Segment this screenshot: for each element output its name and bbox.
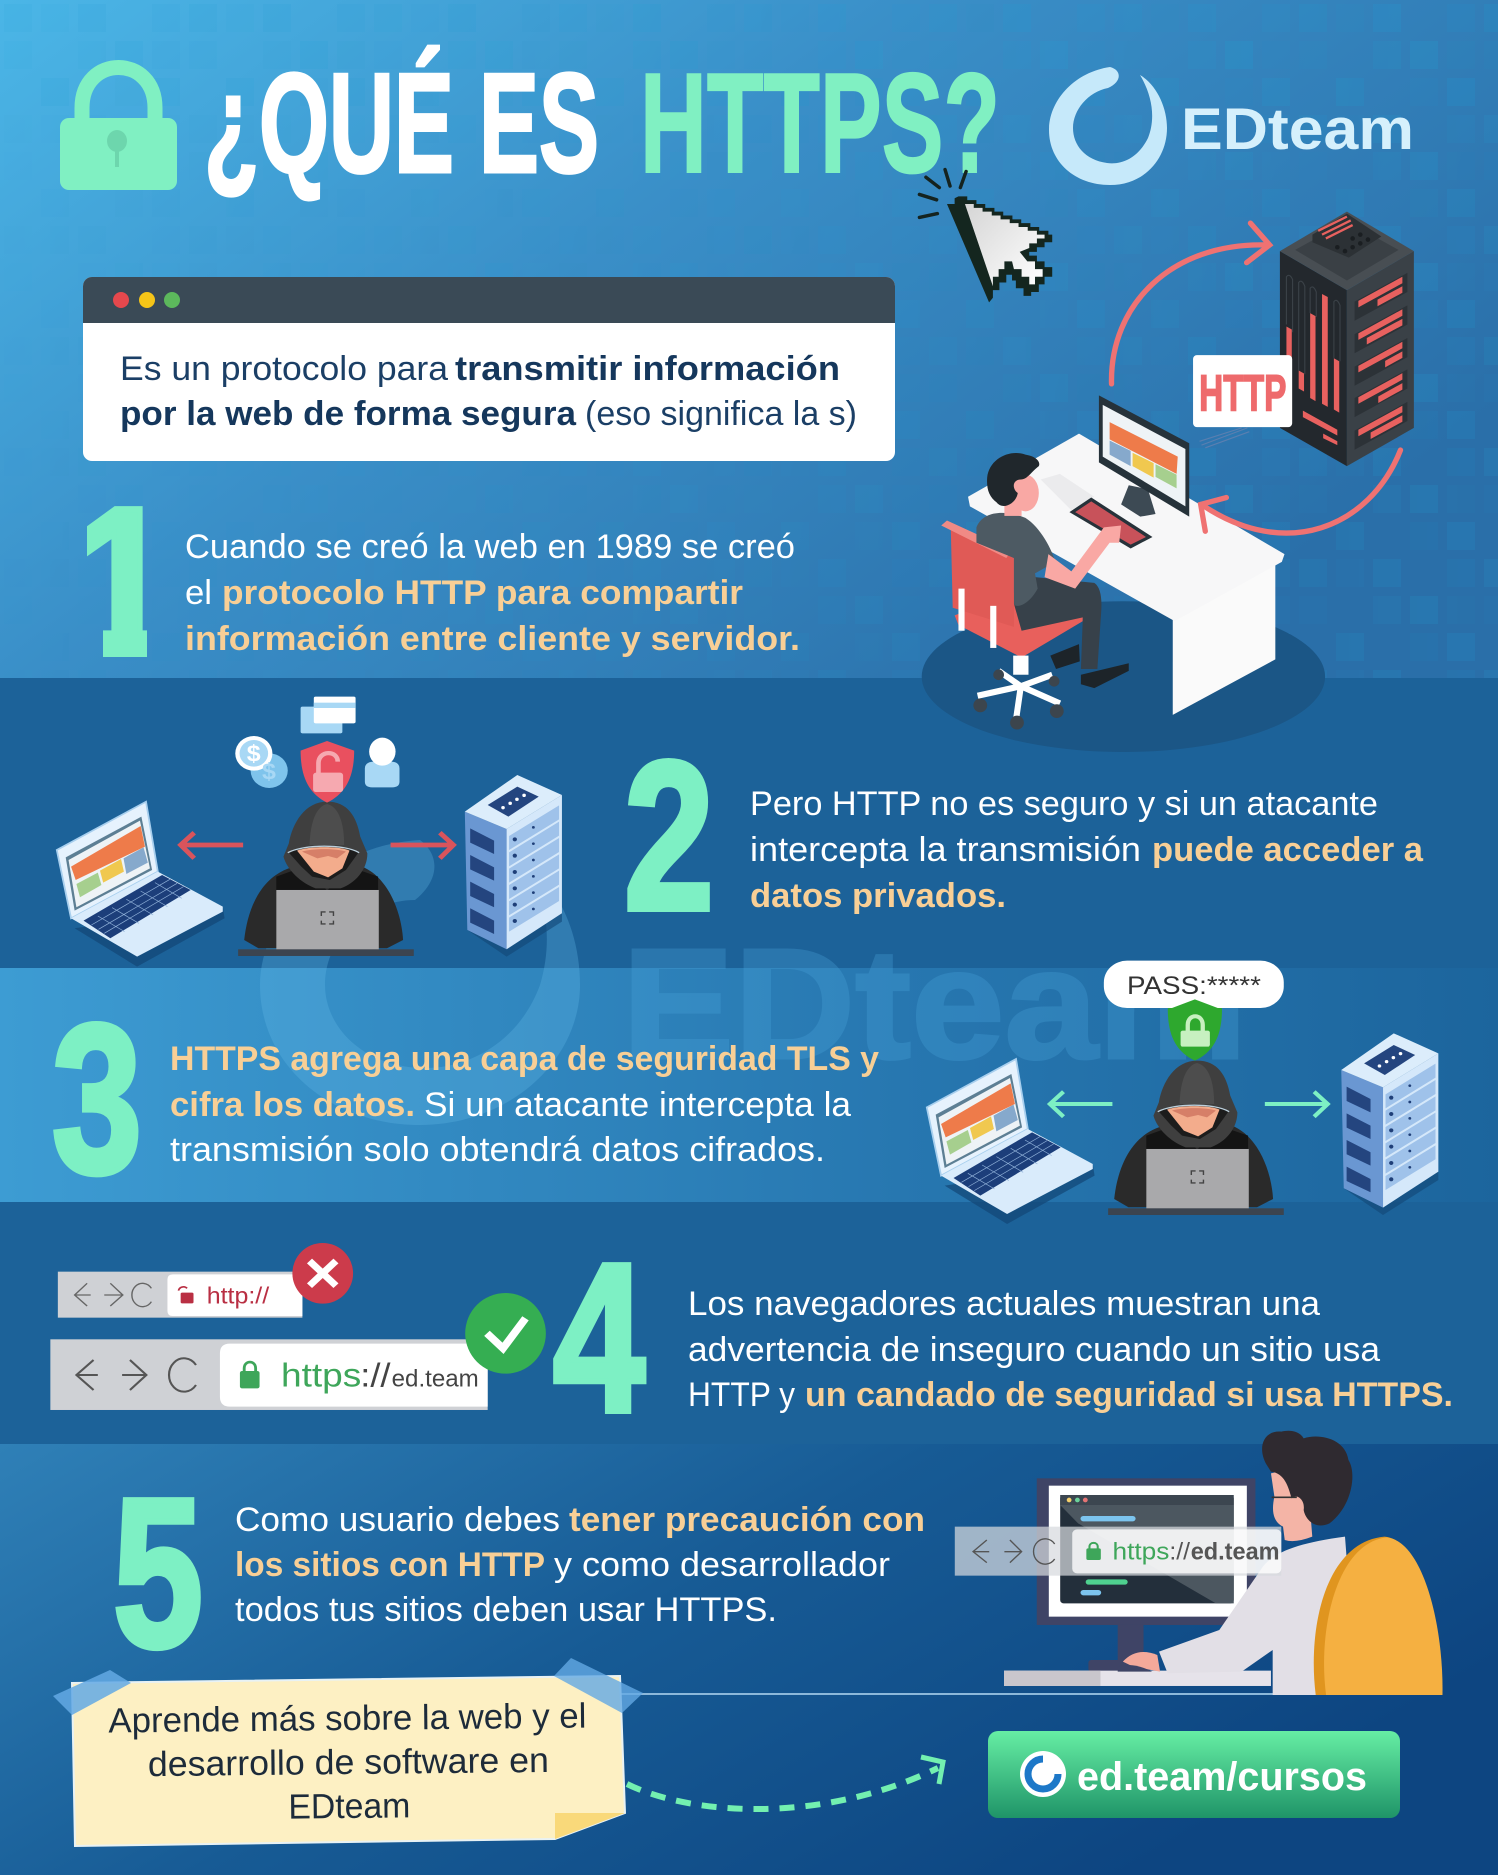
illustration: developer at monitor (955, 1431, 1443, 1695)
icon: coins (235, 736, 288, 788)
text: step 3: cifra los datos. (170, 1086, 415, 1124)
text: step 1: protocolo HTTP para compartir (222, 574, 743, 612)
desk (1004, 1671, 1271, 1686)
icon: padlock (60, 68, 177, 190)
sticky note (53, 1658, 643, 1846)
hacker (1108, 1061, 1284, 1215)
illustration: browser address bars (50, 1243, 546, 1410)
https bar: ed.team (392, 1365, 479, 1392)
text: step 2: datos privados. (750, 877, 1006, 915)
text: step 5: tener precaución con (569, 1501, 925, 1539)
person (976, 453, 1129, 688)
icon: error (292, 1243, 353, 1304)
panel: browser window definition (83, 277, 895, 461)
text: step 5: Como usuario debes (235, 1501, 560, 1539)
background band 1 (0, 0, 1498, 678)
text: step 3: 3 (52, 980, 142, 1217)
text: step 2 (624, 717, 1424, 954)
text: step 1: Cuando se creó la web en 1989 se creó (185, 528, 795, 566)
panel: browser window definition: (eso significa la s) (585, 395, 857, 433)
monitor (1099, 395, 1189, 517)
background band 3 (0, 968, 1498, 1202)
text: step 3 (52, 980, 879, 1217)
arrows (181, 833, 453, 858)
illustration: attacker sees encrypted data (927, 961, 1438, 1224)
background band 5 (0, 1444, 1498, 1875)
person (1118, 1431, 1357, 1695)
title: ¿QUÉ ES (204, 44, 599, 203)
logo: EDteam: EDteam (1181, 97, 1414, 162)
monitor (1037, 1478, 1255, 1672)
server (1341, 1033, 1438, 1215)
text: step 5: todos tus sitios deben usar HTTPS. (235, 1591, 777, 1629)
label: HTTP (1193, 355, 1292, 448)
server (465, 775, 562, 957)
logo: EDteam (1049, 67, 1414, 185)
address bar overlay (955, 1527, 1281, 1576)
text: step 4: Los navegadores actuales muestran una (688, 1285, 1320, 1323)
text: step 4: HTTP y (688, 1376, 795, 1414)
address bar overlay: https (1113, 1539, 1169, 1565)
text: step 4: advertencia de inseguro cuando un sitio usa (688, 1331, 1380, 1369)
arrow: dashed to button (627, 1757, 943, 1809)
icon: success (465, 1293, 546, 1374)
icon: coins: $ (262, 759, 277, 785)
address bar overlay: :// (1169, 1539, 1190, 1565)
https bar: https (281, 1358, 361, 1394)
server (1280, 212, 1414, 466)
text: step 2: intercepta la transmisión (750, 831, 1141, 869)
sticky note: Aprende más sobre la web y el (108, 1697, 587, 1741)
laptop (57, 802, 225, 967)
text: step 4: un candado de seguridad si usa HTTPS. (805, 1376, 1453, 1414)
text: step 1: 1 (70, 463, 175, 700)
hacker (238, 802, 414, 956)
text: step 4: 4 (553, 1219, 645, 1456)
text: step 5: los sitios con HTTP (235, 1546, 545, 1584)
text: step 5: 5 (113, 1454, 203, 1691)
laptop (927, 1059, 1095, 1224)
square pattern (1410, 485, 1412, 624)
chair (1314, 1537, 1443, 1695)
illustration: person at desk with HTTP server (919, 170, 1414, 752)
watermark: EDteam logo: EDteam (622, 917, 1247, 1092)
button: ed.team/cursos (988, 1731, 1400, 1818)
http bar (58, 1272, 302, 1318)
arrow: request (1111, 223, 1270, 384)
arrows (1050, 1092, 1328, 1117)
label: HTTP: HTTP (1199, 365, 1286, 422)
text: step 5: y como desarrollador (554, 1546, 890, 1584)
icon: user (365, 738, 399, 787)
icon: coins: $ (247, 741, 261, 767)
watermark: EDteam logo (260, 840, 1247, 1125)
divider line (620, 1693, 1440, 1695)
green shield (1168, 999, 1222, 1061)
bubble: PASS: PASS:***** (1127, 973, 1261, 1000)
keyboard (1069, 498, 1152, 548)
panel: browser window definition: Es un protocolo para (120, 350, 448, 388)
title: HTTPS? (640, 44, 1000, 203)
text: step 5 (113, 1454, 925, 1691)
background band 4 (0, 1202, 1498, 1444)
text: step 1 (70, 463, 800, 700)
sticky note: desarrollo de software en (148, 1741, 549, 1784)
desk (968, 434, 1285, 715)
text: step 1: el (185, 574, 212, 612)
icon: red shield (301, 741, 354, 803)
bubble: PASS (1104, 961, 1284, 1008)
button: ed.team/cursos: ed.team/cursos (1077, 1755, 1367, 1799)
text: step 1: información entre cliente y servidor. (185, 620, 800, 658)
text: step 2: 2 (624, 717, 714, 954)
http bar: http:// (207, 1283, 269, 1309)
text: step 3: Si un atacante intercepta la (424, 1086, 851, 1124)
text: step 3: transmisión solo obtendrá datos cifrados. (170, 1131, 825, 1169)
text: step 3: HTTPS agrega una capa de seguridad TLS y (170, 1040, 879, 1078)
address bar overlay: ed.team (1191, 1539, 1280, 1565)
arrow: response (1201, 450, 1400, 533)
chair (941, 521, 1083, 729)
icon: cursor (919, 170, 1052, 302)
https bar: :// (360, 1358, 391, 1394)
text: step 2: Pero HTTP no es seguro y si un atacante (750, 785, 1378, 823)
icon: credit cards (301, 697, 356, 733)
panel: browser window definition: por la web de forma segura (120, 395, 577, 433)
sticky note: EDteam (288, 1786, 411, 1827)
background band 2 (0, 678, 1498, 968)
https bar (50, 1339, 488, 1410)
illustration: attacker intercepts HTTP (57, 697, 562, 967)
panel: browser window definition: transmitir información (455, 350, 840, 388)
text: step 2: puede acceder a (1152, 831, 1424, 869)
text: step 4 (553, 1219, 1453, 1456)
